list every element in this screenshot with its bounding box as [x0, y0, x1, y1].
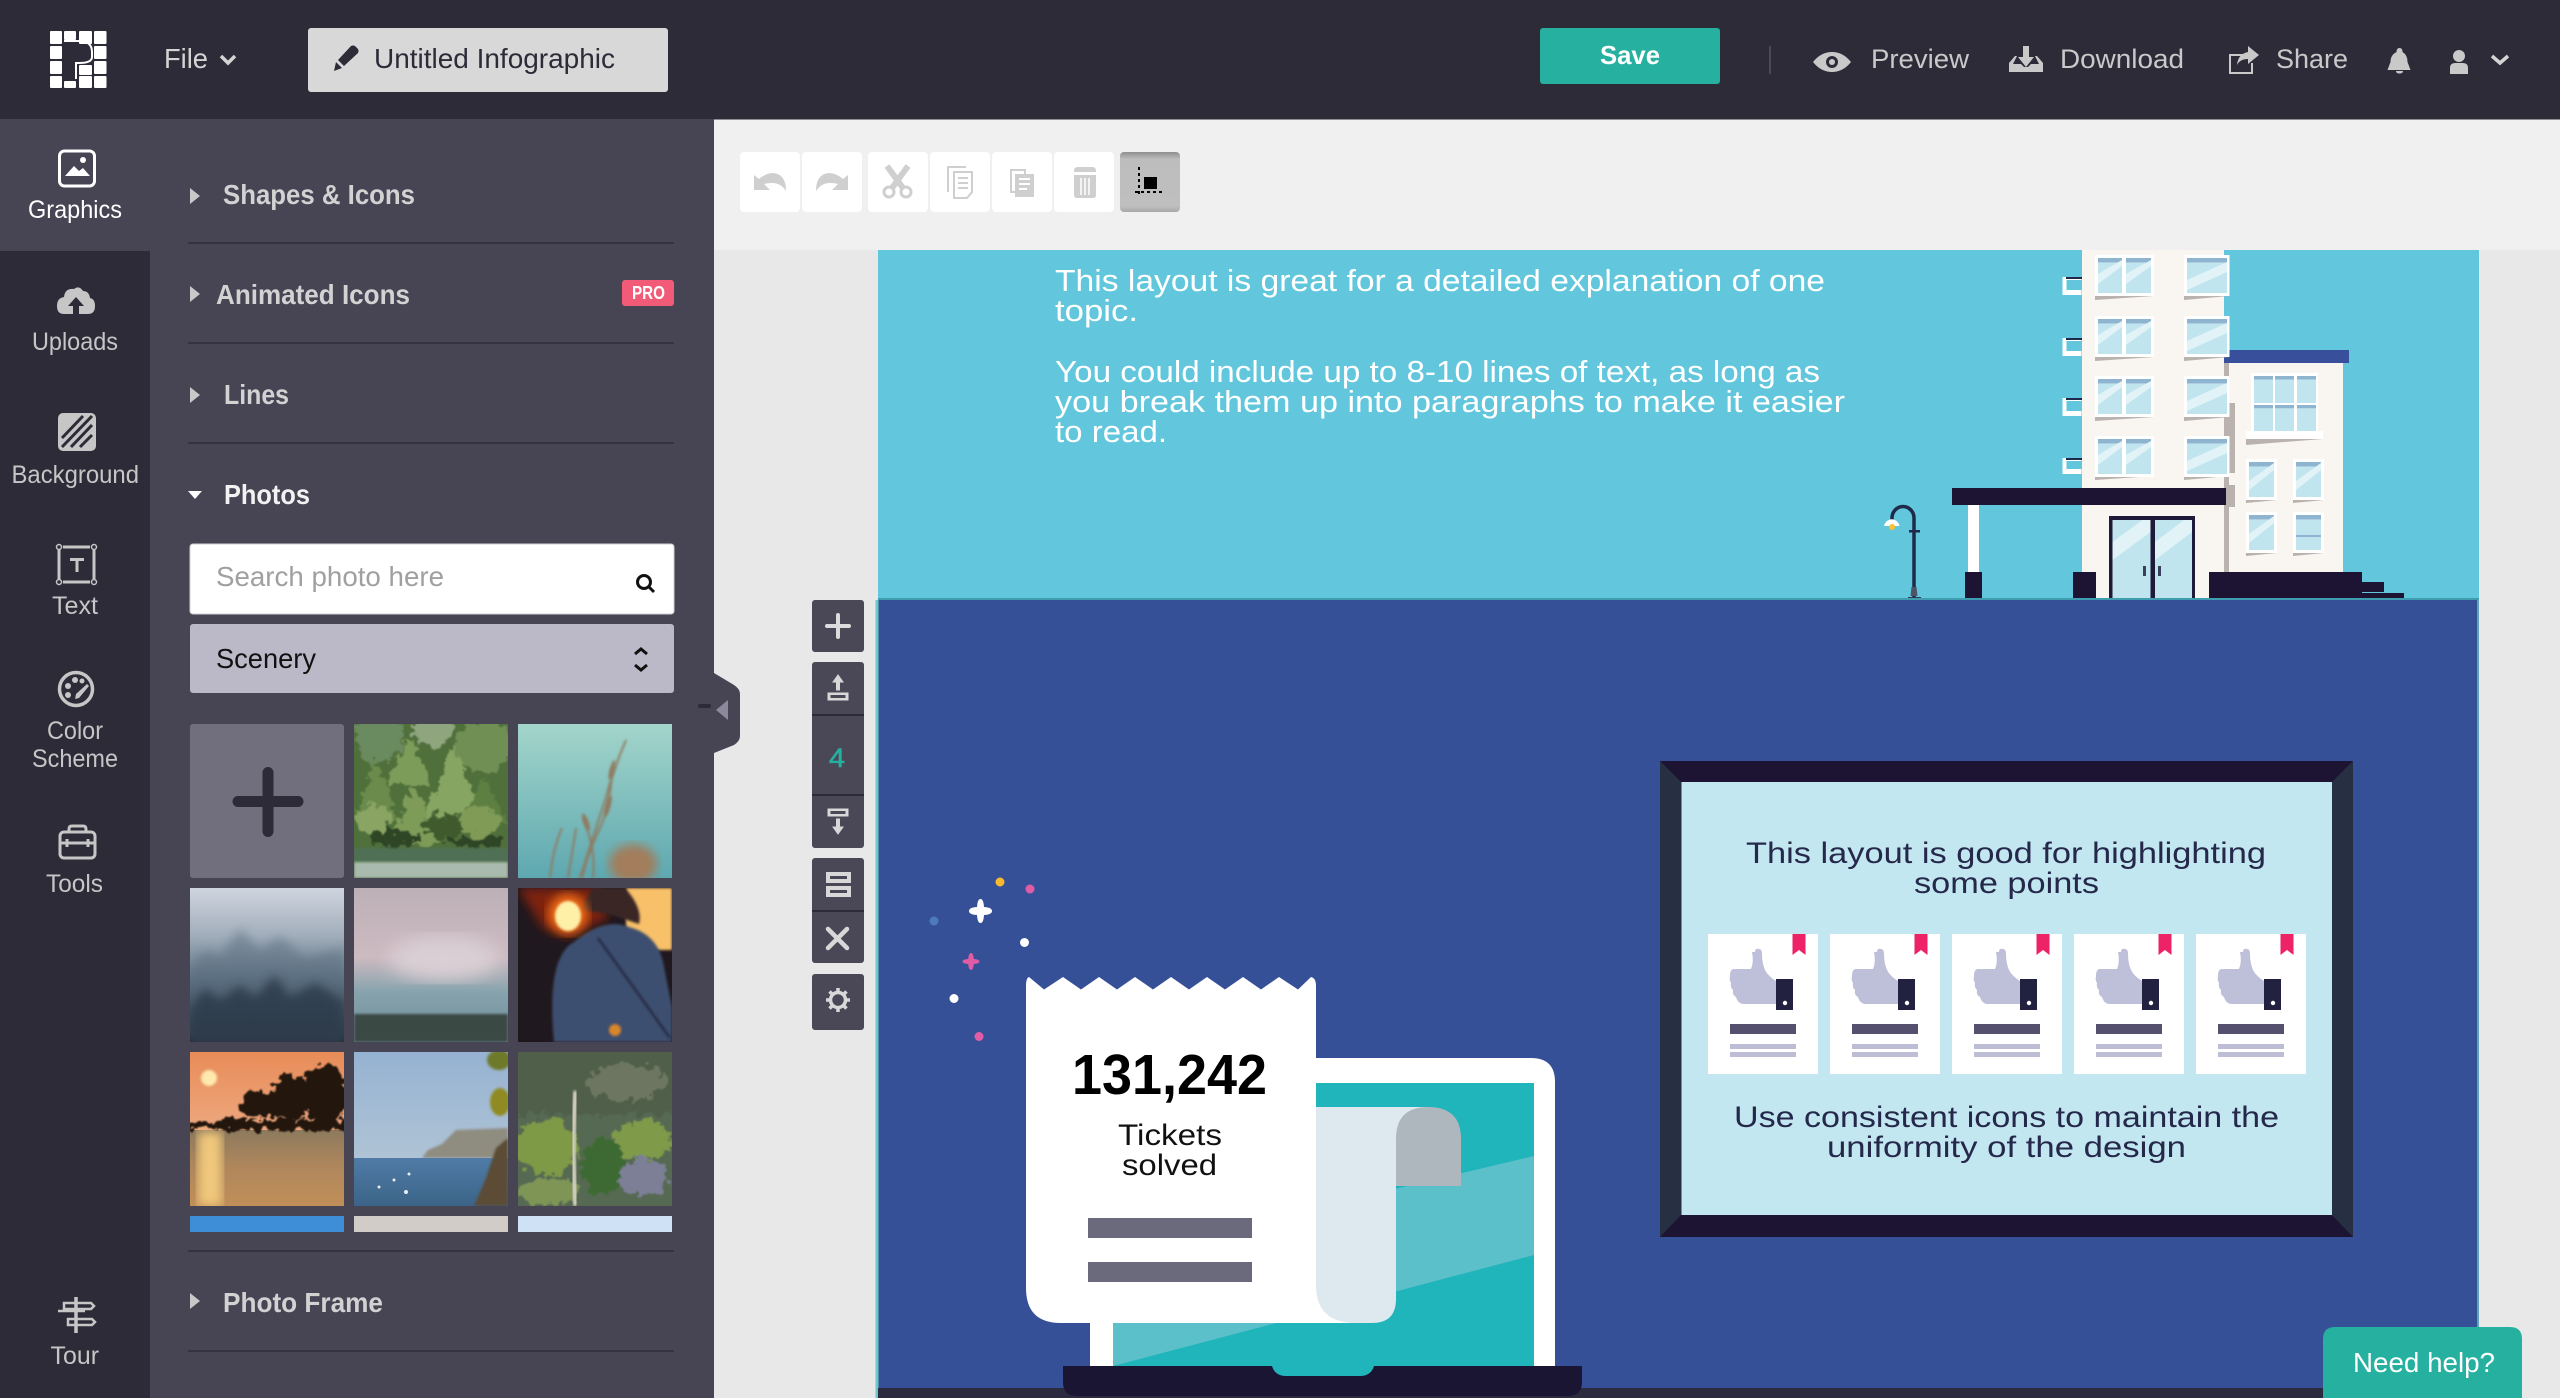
nav item: tour: Tour — [50, 1342, 99, 1370]
statistic number: 131,242 — [1072, 1043, 1267, 1107]
infographic section: dark blue lower area — [876, 598, 2479, 1398]
share action: Share — [2276, 44, 2348, 74]
download action — [2009, 44, 2184, 74]
notifications bell — [2388, 48, 2410, 74]
section controls — [812, 600, 864, 1030]
body text paragraphs: you break them up into paragraphs to make it easier — [1055, 384, 1845, 419]
download action: Download — [2060, 44, 2184, 74]
nav item: background: Background — [12, 461, 139, 489]
accordion: lines — [188, 379, 674, 444]
entrance awning — [1952, 487, 2235, 572]
statistic label — [1118, 1119, 1222, 1182]
nav item: color scheme: Scheme — [32, 745, 118, 773]
card 1 — [1708, 934, 1818, 1074]
canvas workspace background — [714, 119, 2560, 1398]
side building windows — [2246, 373, 2324, 556]
photo: misty forest — [190, 888, 344, 1042]
undo and redo buttons — [740, 152, 862, 212]
card 4 — [2074, 934, 2184, 1074]
file menu — [164, 43, 235, 74]
framed callout panel — [1660, 761, 2353, 1237]
save button: Save — [1600, 40, 1660, 70]
nav item: background — [12, 413, 139, 489]
accordion: shapes and icons: Shapes & Icons — [223, 179, 415, 210]
street lamp — [1884, 507, 1921, 600]
logo — [50, 31, 106, 88]
body text paragraphs: topic. — [1055, 293, 1138, 328]
accordion: photo frame — [188, 1287, 674, 1352]
body text paragraphs: You could include up to 8-10 lines of text, as long as — [1055, 354, 1820, 389]
accordion: animated icons: Animated Icons — [216, 279, 410, 310]
body text paragraphs — [1055, 263, 1845, 449]
icon: paste — [1011, 170, 1034, 197]
nav item: text — [52, 544, 98, 620]
nav item: color scheme: Color — [47, 717, 103, 745]
accordion: photo frame: Photo Frame — [223, 1287, 383, 1318]
share action — [2229, 44, 2348, 74]
nav item: graphics: Graphics — [28, 196, 122, 224]
accordion: lines: Lines — [224, 379, 289, 410]
duplicate and delete section group — [812, 858, 864, 963]
photo search field — [190, 544, 674, 614]
need help button — [2323, 1327, 2522, 1398]
icon: scissors — [884, 166, 911, 197]
receipt bars — [1088, 1218, 1252, 1282]
balconies — [2062, 277, 2082, 474]
accordion: photos header — [188, 479, 310, 510]
nav item: uploads: Uploads — [32, 328, 118, 356]
accordion: animated icons — [188, 279, 674, 344]
callout heading: some points — [1914, 867, 2099, 900]
document title field — [308, 28, 668, 92]
statistic label: solved — [1122, 1149, 1217, 1182]
nav item: tour — [50, 1297, 99, 1370]
callout footer text — [1734, 1101, 2279, 1164]
snap toggle button — [1120, 152, 1180, 212]
callout footer text: uniformity of the design — [1827, 1131, 2186, 1164]
need help button: Need help? — [2353, 1347, 2495, 1378]
photo: cloudy shoreline — [354, 888, 508, 1042]
photo: hillside vegetation — [518, 1052, 672, 1206]
entrance door — [2109, 516, 2195, 600]
nav item: tools — [46, 826, 103, 898]
nav item: tools: Tools — [46, 870, 103, 898]
section order group: 4 — [829, 743, 845, 773]
editing toolbar — [740, 152, 1180, 212]
photo category select: Scenery — [216, 643, 316, 674]
card 5 — [2196, 934, 2306, 1074]
photo: sun behind person — [518, 888, 672, 1042]
card 2 — [1830, 934, 1940, 1074]
photo search field: Search photo here — [216, 561, 444, 592]
collapse handle — [698, 673, 740, 753]
left navigation rail — [0, 119, 150, 1398]
preview action: Preview — [1871, 44, 1970, 74]
callout footer text: Use consistent icons to maintain the — [1734, 1101, 2279, 1134]
preview action — [1813, 44, 1970, 74]
sparkles — [930, 878, 1034, 1041]
nav item: graphics — [28, 151, 122, 224]
callout heading: This layout is good for highlighting — [1746, 837, 2266, 870]
infographic section: light blue top with text and building — [878, 250, 2479, 600]
nav item: uploads — [32, 287, 118, 356]
file menu: File — [164, 43, 208, 74]
photo: forest — [354, 724, 508, 878]
icon: delete — [1074, 167, 1096, 198]
photo category select — [190, 624, 674, 693]
add section button — [812, 600, 864, 652]
clipboard buttons — [868, 152, 1114, 212]
receipt with statistic — [1026, 977, 1461, 1323]
callout heading — [1746, 837, 2266, 900]
add photo tile — [190, 724, 344, 878]
photo: sea and headland — [354, 1052, 508, 1206]
card 3 — [1952, 934, 2062, 1074]
body text paragraphs: to read. — [1055, 414, 1167, 449]
partial photo row — [190, 1216, 672, 1232]
accordion: photos header: Photos — [224, 479, 310, 510]
body text paragraphs: This layout is great for a detailed explanation of one — [1055, 263, 1825, 298]
section settings button — [812, 974, 864, 1030]
statistic label: Tickets — [1118, 1119, 1222, 1152]
photo: sunset over lake — [190, 1052, 344, 1206]
user menu — [2450, 50, 2508, 74]
side panel — [150, 119, 740, 1398]
building base and steps — [1965, 572, 2404, 600]
icon: copy — [948, 167, 972, 198]
section order group — [812, 662, 864, 848]
document title field: Untitled Infographic — [374, 43, 615, 74]
accordion: animated icons: PRO — [632, 283, 665, 303]
nav item: color scheme — [32, 672, 118, 773]
save button — [1540, 28, 1720, 84]
building — [1952, 250, 2404, 600]
laptop — [1063, 1058, 1582, 1396]
tower windows — [2095, 255, 2230, 480]
accordion: shapes and icons — [188, 179, 674, 244]
nav item: text: Text — [52, 592, 98, 620]
top header bar — [0, 0, 2560, 120]
photo: grass on teal — [518, 724, 672, 878]
